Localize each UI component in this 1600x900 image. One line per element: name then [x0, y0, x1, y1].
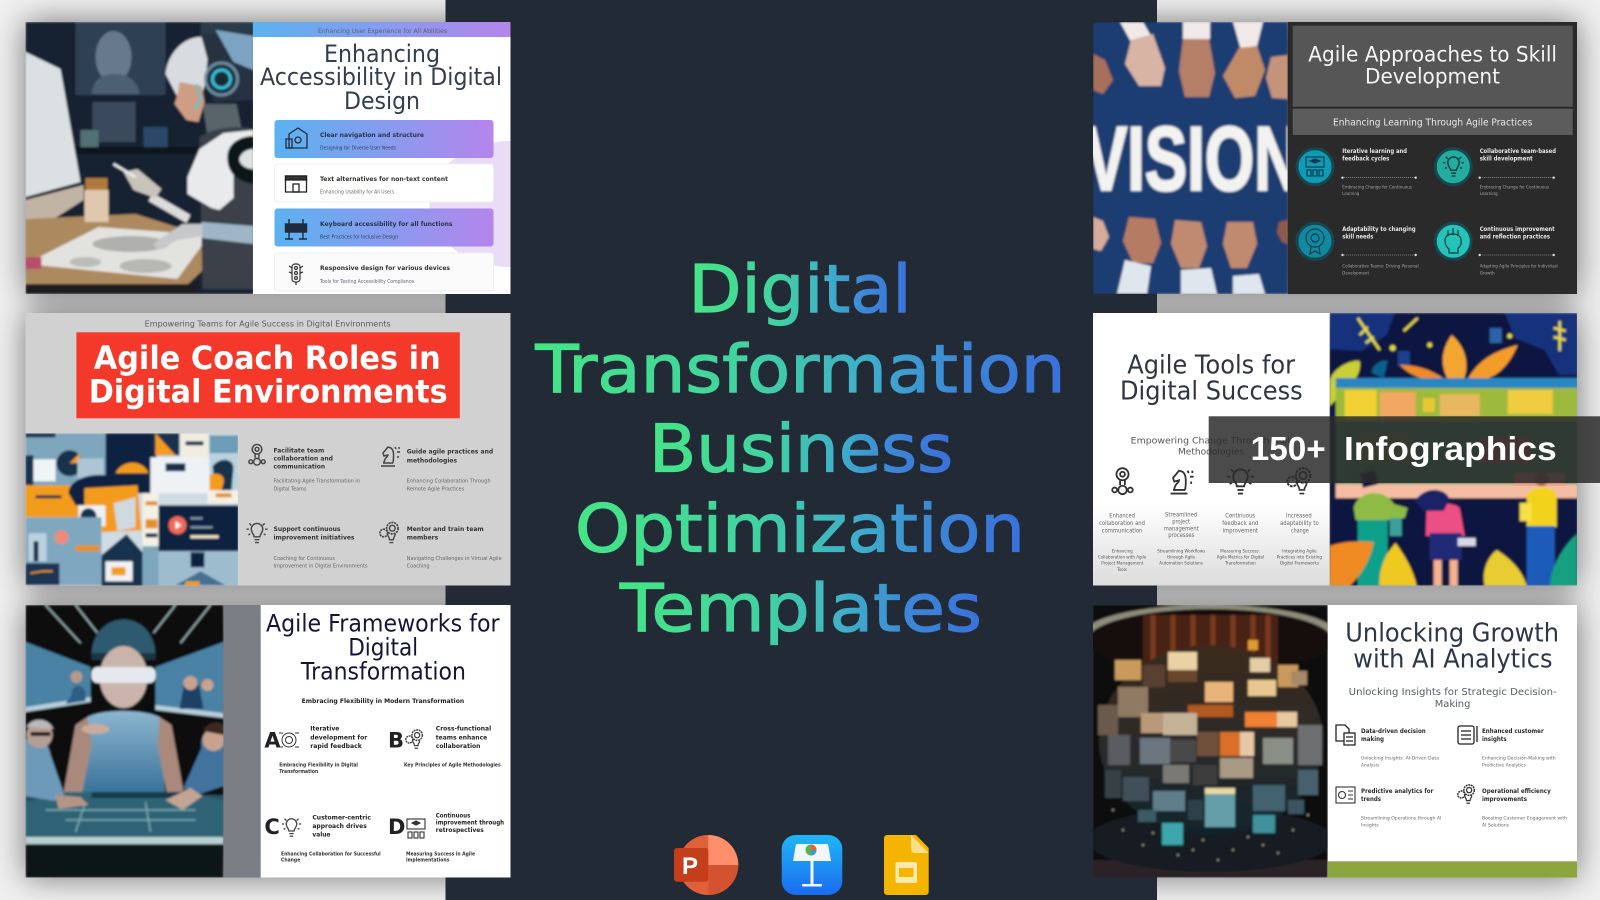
item C: C: [264, 815, 280, 839]
title box: [1293, 26, 1573, 107]
item: enhanced customer insights: insights: [1482, 736, 1507, 743]
heading: with AI Analytics: [1353, 645, 1553, 675]
grey divider bar: [224, 605, 261, 878]
top strip with subtitle: Enhancing User Experience for All Abilities: [318, 27, 448, 35]
icon: powerpoint: P: [682, 853, 698, 880]
card: responsive design: [274, 253, 494, 291]
item: facilitate team: [249, 444, 360, 492]
item: support continuous improvement: Improvement in Digital Environments: [274, 564, 368, 570]
heading: Accessibility in Digital: [260, 63, 502, 91]
content background: [1093, 313, 1330, 586]
item D: retrospectives: [436, 827, 484, 834]
subheading: [1349, 687, 1557, 710]
item: guide agile practices: [381, 447, 493, 492]
column: continuous feedback: Agile Metrics for Digital: [1217, 555, 1264, 561]
item D: improvement through: [436, 820, 504, 827]
item: support continuous improvement: improvement initiatives: [274, 535, 355, 542]
item: data-driven decision making: Data-driven decision: [1361, 728, 1426, 735]
item: iterative learning: [1297, 148, 1417, 197]
column: continuous feedback: feedback and: [1222, 521, 1259, 527]
item: continuous improvement: and reflection practices: [1480, 234, 1550, 241]
card: responsive design: Tools for Testing Accessibility Compliance: [319, 279, 414, 285]
column: increased adaptability: [1277, 468, 1322, 567]
item: data-driven decision making: making: [1361, 736, 1384, 743]
item: collaborative team-based: skill development: [1480, 156, 1533, 163]
column: increased adaptability: Integrating Agile: [1282, 548, 1317, 554]
heading: Transformation: [300, 658, 466, 686]
banner: 150+ infographics: 150+: [1251, 430, 1326, 467]
icon: barrier: [285, 219, 307, 239]
item: adaptability: skill needs: [1342, 234, 1374, 241]
item: guide agile practices: Guide agile practices and: [407, 448, 493, 455]
title box: Development: [1365, 64, 1500, 88]
subheading: Making: [1435, 699, 1470, 710]
item: facilitate team: collaboration and: [274, 455, 333, 462]
column: enhanced collaboration: Enhancing: [1112, 548, 1133, 554]
content background: [1288, 22, 1577, 294]
item: facilitate team: Digital Teams: [274, 486, 307, 492]
title box: Agile Approaches to Skill: [1308, 43, 1557, 67]
item D: D: [388, 815, 405, 839]
item: operational efficiency: [1458, 785, 1567, 829]
item: data-driven decision making: [1336, 725, 1439, 769]
item: mentor and train: Mentor and train team: [407, 526, 484, 533]
item D: Implementations: [406, 858, 449, 864]
item C: Enhancing Collaboration for Successful: [281, 851, 381, 857]
column: increased adaptability: Practices into Existing: [1277, 555, 1322, 561]
subtitle box: [1293, 109, 1573, 135]
column: increased adaptability: change: [1291, 529, 1309, 535]
green footer bar: [1328, 861, 1577, 878]
red title box: [76, 332, 460, 418]
column: streamlined project management: processes: [1168, 533, 1194, 539]
item B: collaboration: [436, 743, 480, 750]
item: mentor and train: members: [407, 535, 438, 542]
column: streamlined project management: [1157, 471, 1206, 567]
column: continuous feedback: Measuring Success:: [1220, 548, 1260, 554]
item: support continuous improvement: Coaching for Continuous: [274, 556, 336, 562]
item: support continuous improvement: [246, 523, 368, 570]
item: support continuous improvement: Support continuous: [274, 526, 341, 533]
main title: Business: [649, 410, 953, 488]
item: mentor and train: [380, 522, 502, 570]
column: enhanced collaboration: communication: [1102, 529, 1143, 535]
item: adaptability: [1297, 223, 1419, 276]
main title: Digital: [688, 251, 912, 328]
main title: Optimization: [575, 490, 1025, 568]
icon: keynote: [782, 835, 842, 895]
item: predictive analytics: Predictive analytics for: [1361, 788, 1433, 795]
card: text alternatives: Enhancing Usability for All Users: [320, 190, 394, 196]
item C: approach drives: [312, 823, 367, 830]
item C: [264, 814, 381, 864]
subheading: Embracing Flexibility in Modern Transformation: [302, 698, 464, 705]
subtitle: Empowering Teams for Agile Success in Digital Environments: [145, 320, 391, 329]
image: 3D data cubes: [1093, 605, 1328, 878]
panel: unlocking growth with ai analytics: [1085, 605, 1577, 878]
card: clear navigation: Clear navigation and structure: [320, 131, 425, 139]
card: keyboard accessibility: Best Practices for Inclusive Design: [320, 234, 398, 240]
item B: B: [388, 728, 404, 752]
panel: agile coach roles: [26, 313, 510, 586]
banner: 150+ infographics: Infographics: [1344, 430, 1557, 467]
item A: Embracing Flexibility in Digital: [279, 762, 358, 768]
item: continuous improvement: [1435, 223, 1558, 276]
icon: house and devices: [286, 128, 307, 148]
item: adaptability: Collaborative Teams: Driving Personal: [1342, 264, 1419, 270]
main title: Templates: [619, 570, 982, 647]
card: keyboard accessibility: Keyboard accessibility for all functions: [320, 220, 453, 228]
subtitle box: Enhancing Learning Through Agile Practices: [1333, 117, 1532, 128]
item: data-driven decision making: Unlocking Insights: AI-Driven Data: [1361, 755, 1439, 761]
column: continuous feedback: Continuous: [1225, 513, 1255, 519]
item B: Cross-functional: [436, 726, 491, 733]
column: enhanced collaboration: collaboration and: [1099, 521, 1145, 527]
column: streamlined project management: through Agile: [1167, 555, 1195, 561]
item: mentor and train: Coaching: [407, 564, 430, 570]
item: adaptability: Adaptability to changing: [1342, 226, 1416, 233]
item B: teams enhance: [436, 734, 487, 741]
item: operational efficiency: Operational efficiency: [1482, 788, 1551, 795]
main title: Transformation: [534, 331, 1066, 408]
item: facilitate team: Facilitate team: [274, 447, 325, 454]
red title box: Agile Coach Roles in: [94, 339, 441, 377]
card: keyboard accessibility: [274, 208, 494, 246]
item A: [264, 726, 368, 775]
item C: value: [312, 832, 330, 839]
card: text alternatives: [274, 164, 494, 202]
item: operational efficiency: AI Solutions: [1482, 823, 1510, 829]
item B: Key Principles of Agile Methodologies: [404, 762, 501, 768]
item: guide agile practices: methodologies: [407, 457, 457, 464]
heading: Digital Success: [1120, 376, 1303, 406]
column: streamlined project management: Automation Solutions: [1159, 561, 1204, 567]
item: facilitate team: communication: [274, 463, 325, 470]
item D: Continuous: [436, 812, 471, 819]
panel: enhancing accessibility: [26, 22, 510, 294]
column: continuous feedback: improvement: [1223, 529, 1259, 535]
column: streamlined project management: Streamlined: [1165, 513, 1198, 519]
column: enhanced collaboration: Enhanced: [1109, 513, 1135, 519]
column: continuous feedback: Transformation: [1224, 561, 1256, 567]
heading: [1120, 350, 1303, 406]
panel: agile approaches to skill development: [1085, 22, 1577, 294]
item: enhanced customer insights: Predictive Analytics: [1482, 763, 1527, 769]
icon: powerpoint: [674, 835, 738, 895]
item: data-driven decision making: Analysis: [1361, 763, 1380, 769]
heading: Enhancing: [324, 40, 440, 68]
item C: Customer-centric: [312, 814, 371, 821]
heading: Digital: [348, 634, 418, 662]
item: guide agile practices: Enhancing Collaboration Through: [407, 478, 491, 484]
item: collaborative team-based: Embracing Change for Continuous: [1480, 184, 1550, 190]
column: streamlined project management: management: [1164, 526, 1199, 532]
image: woman in helmet at holographic table: [26, 605, 224, 878]
item: predictive analytics: [1336, 787, 1441, 829]
column: continuous feedback: [1217, 469, 1264, 567]
card: responsive design: Responsive design for various devices: [320, 264, 450, 272]
item A: rapid feedback: [310, 743, 363, 750]
item A: A: [264, 728, 281, 752]
heading: Agile Tools for: [1127, 350, 1295, 380]
content background: [253, 22, 510, 294]
item: mentor and train: Navigating Challenges in Virtual Agile: [407, 556, 502, 562]
item: iterative learning: Iterative learning and: [1342, 148, 1407, 155]
column: streamlined project management: project: [1172, 520, 1191, 526]
column: increased adaptability: adaptability to: [1280, 521, 1319, 527]
item: collaborative team-based: [1435, 148, 1556, 197]
subheading: Empowering Change Through Agile: [1131, 436, 1296, 447]
item: iterative learning: Embracing Change for Continuous: [1342, 184, 1413, 190]
item: predictive analytics: trends: [1361, 796, 1381, 803]
card: text alternatives: Text alternatives for non-text content: [320, 175, 448, 183]
item D: Measuring Success in Agile: [406, 851, 476, 857]
item: guide agile practices: Remote Agile Practices: [407, 486, 465, 492]
heading: [266, 610, 500, 686]
icon: traffic light: [289, 264, 303, 285]
panel: agile tools for digital success: [1093, 313, 1578, 586]
heading: Design: [344, 87, 420, 115]
content background: [1328, 605, 1577, 878]
heading: [1345, 619, 1559, 675]
heading: [260, 40, 502, 115]
column: enhanced collaboration: [1098, 468, 1146, 573]
item: predictive analytics: Insights: [1361, 823, 1379, 829]
item: collaborative team-based: Learning: [1480, 191, 1498, 197]
item A: Iterative: [310, 726, 339, 733]
item: continuous improvement: Continuous improvement: [1480, 226, 1555, 233]
panel: agile frameworks: [26, 605, 510, 878]
image: team at a kanban board in a jungle: [1330, 313, 1577, 586]
column: increased adaptability: Increased: [1286, 513, 1312, 519]
main title: [534, 251, 1066, 647]
subheading: [1131, 436, 1296, 457]
item: facilitate team: Facilitating Agile Transformation in: [274, 478, 360, 484]
item: adaptability: Development: [1342, 270, 1369, 276]
item: enhanced customer insights: [1458, 726, 1556, 769]
item A: Transformation: [279, 769, 319, 775]
column: enhanced collaboration: Tools: [1116, 567, 1128, 573]
heading: Agile Frameworks for: [266, 610, 500, 638]
image: robot designer at a desk: [26, 22, 253, 294]
column: increased adaptability: Digital Frameworks: [1280, 561, 1320, 567]
item: predictive analytics: Streamlining Operations through AI: [1361, 815, 1441, 821]
card: clear navigation: Designing for Diverse User Needs: [320, 146, 396, 152]
banner: 150+ infographics: [1209, 416, 1600, 483]
decorative purple circle: [430, 141, 510, 267]
item: operational efficiency: improvements: [1482, 796, 1527, 803]
item: enhanced customer insights: Enhancing Decision-Making with: [1482, 755, 1556, 761]
column: streamlined project management: Streamlining Workflows: [1157, 548, 1206, 554]
image: vision with fists: [1085, 22, 1300, 294]
item D: [388, 812, 504, 864]
red title box: Digital Environments: [89, 372, 448, 410]
icon: google slides: [884, 835, 929, 895]
subheading: Unlocking Insights for Strategic Decision-: [1349, 687, 1557, 698]
subheading: Methodologies: [1178, 446, 1244, 457]
item: continuous improvement: Growth: [1480, 270, 1495, 276]
item: collaborative team-based: Collaborative team-based: [1480, 148, 1556, 155]
top strip with subtitle: [253, 22, 510, 37]
item A: development for: [310, 734, 368, 741]
column: enhanced collaboration: Project Management: [1101, 561, 1143, 567]
item C: Change: [281, 858, 301, 864]
content background: [261, 605, 510, 878]
card: clear navigation: [274, 120, 494, 158]
item: enhanced customer insights: Enhanced customer: [1482, 728, 1544, 735]
item B: [388, 726, 501, 768]
column: enhanced collaboration: Collaboration with Agile: [1098, 555, 1146, 561]
item: iterative learning: Learning: [1342, 191, 1359, 197]
heading: Unlocking Growth: [1345, 619, 1559, 649]
icon: storefront: [286, 176, 306, 192]
image: flat illustration collage: [26, 433, 238, 586]
item: operational efficiency: Boosting Customer Engagement with: [1482, 815, 1567, 821]
item: iterative learning: feedback cycles: [1342, 156, 1390, 163]
item: continuous improvement: Adapting Agile Principles for Individual: [1480, 264, 1558, 270]
